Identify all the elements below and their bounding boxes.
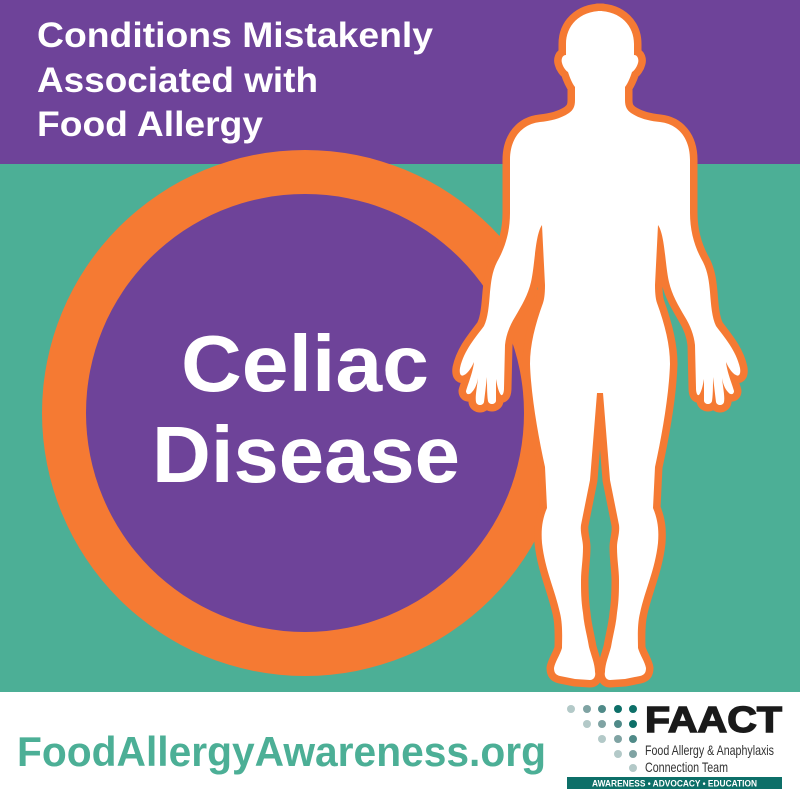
condition name: Disease (152, 410, 460, 499)
logo wordmark: FAACT (645, 699, 782, 740)
orange ring with purple circle (42, 150, 568, 676)
background: green panel (0, 164, 800, 692)
title (37, 16, 434, 144)
condition name (152, 319, 460, 499)
title: Associated with (37, 61, 318, 100)
title: Food Allergy (37, 105, 264, 144)
FAACT logo (567, 699, 782, 789)
icon: dot grid (567, 705, 637, 772)
logo name (645, 742, 774, 775)
title: Conditions Mistakenly (37, 16, 434, 55)
logo name: Connection Team (645, 759, 728, 775)
website url: FoodAllergyAwareness.org (17, 728, 546, 775)
background: white footer (0, 692, 800, 800)
condition name: Celiac (181, 319, 429, 408)
logo tagline bar: AWARENESS • ADVOCACY • EDUCATION (592, 778, 757, 788)
background: purple header band (0, 0, 800, 164)
icon: human body silhouette (460, 11, 740, 680)
logo tagline bar (567, 777, 782, 789)
